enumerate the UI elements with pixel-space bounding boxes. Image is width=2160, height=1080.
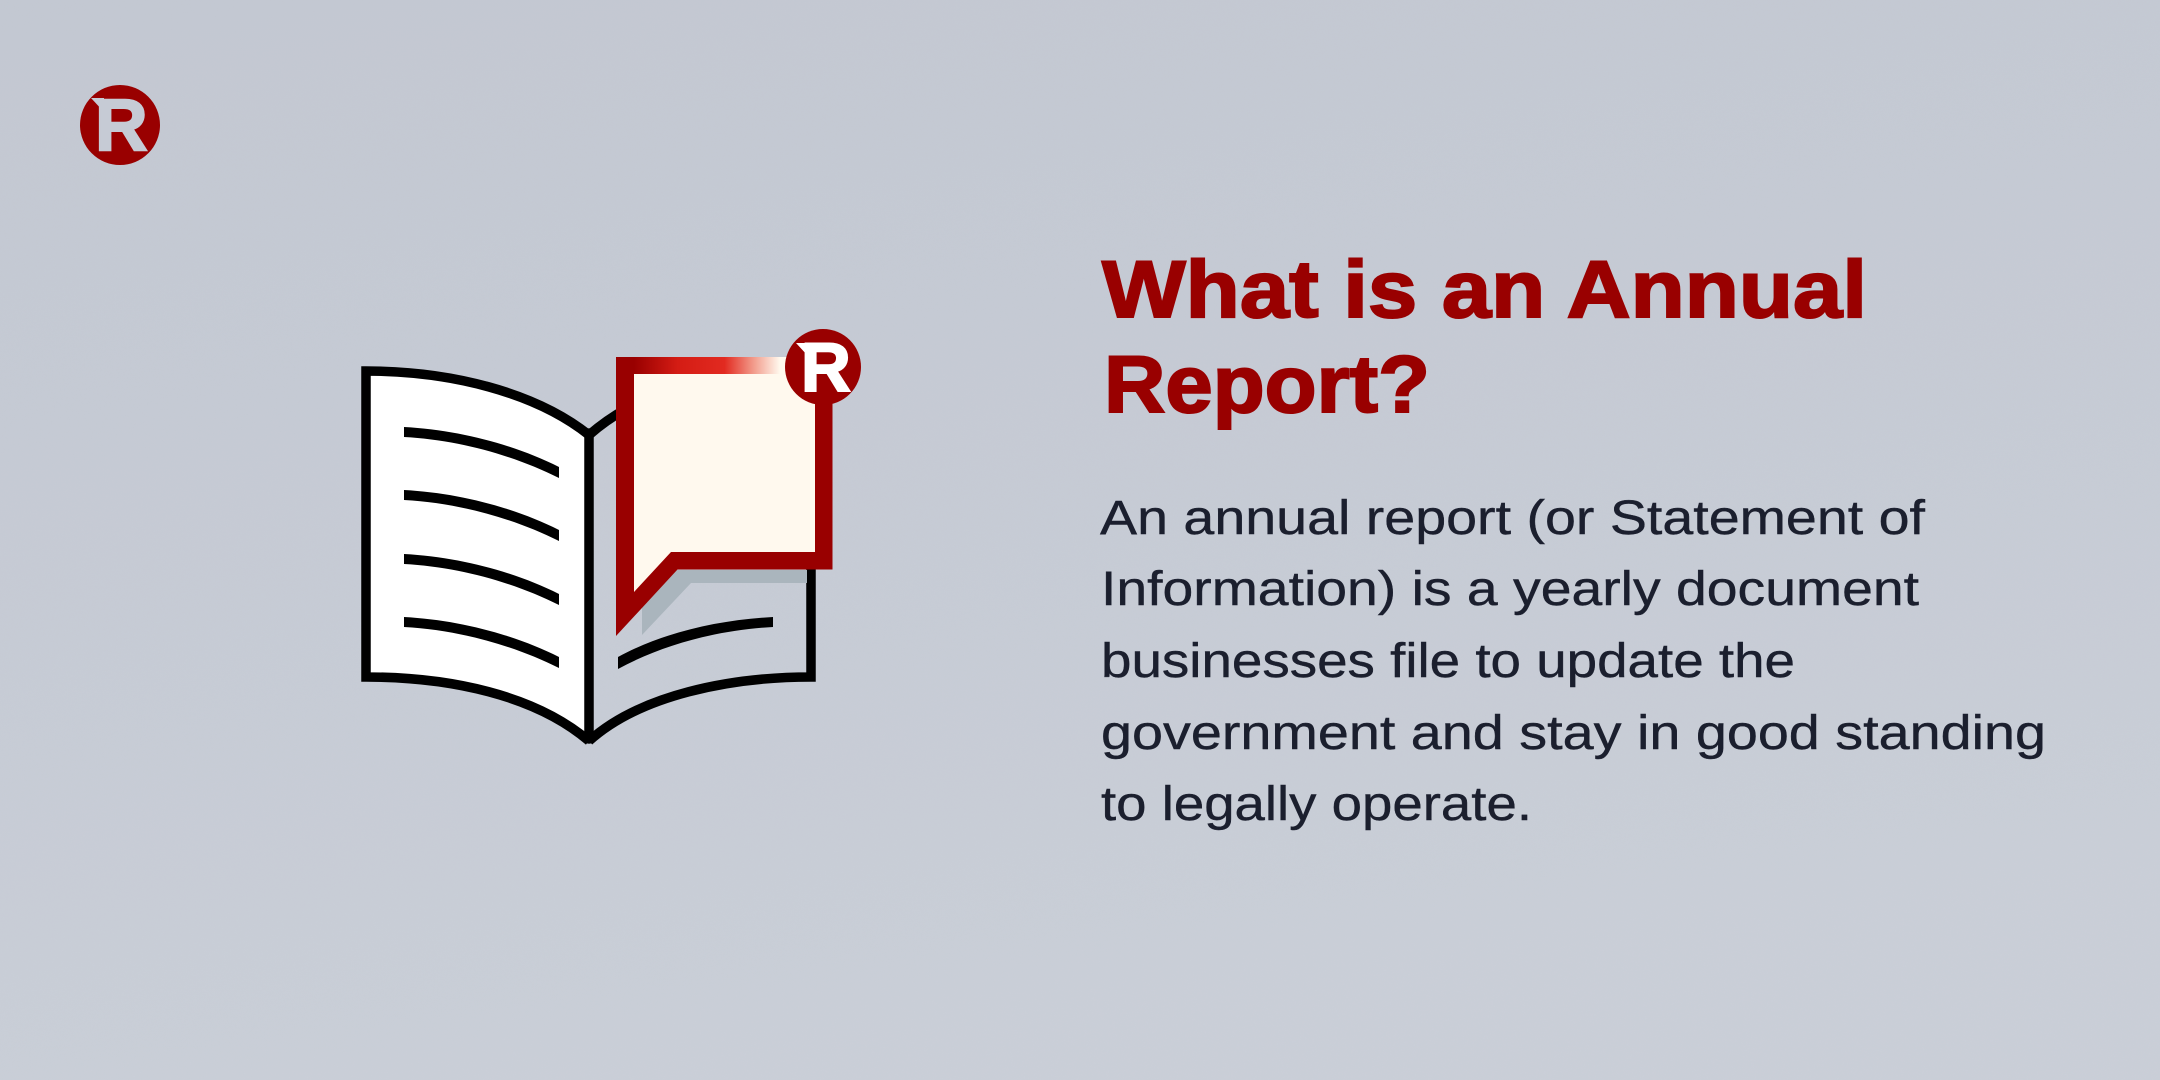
body text: Information) is a yearly document xyxy=(1101,563,1919,616)
speech bubble xyxy=(616,357,832,636)
body text: businesses file to update the xyxy=(1101,635,1795,688)
title: What is an Annual xyxy=(1102,245,1867,335)
book spine xyxy=(584,433,594,739)
icon: brand logo xyxy=(80,85,160,166)
book left page xyxy=(366,371,589,741)
title: Report? xyxy=(1104,340,1430,430)
icon: bubble logo badge: R xyxy=(801,329,851,406)
body text: government and stay in good standing xyxy=(1101,707,2046,760)
book right page xyxy=(589,385,811,741)
title xyxy=(1102,245,1867,430)
illustration: open book with speech bubble xyxy=(366,329,861,741)
body text: An annual report (or Statement of xyxy=(1100,492,1926,545)
body text xyxy=(1100,492,2046,831)
bubble shadow xyxy=(642,570,807,635)
icon: bubble logo badge xyxy=(785,329,861,406)
icon: brand logo: R xyxy=(95,85,148,166)
body text: to legally operate. xyxy=(1101,778,1532,831)
